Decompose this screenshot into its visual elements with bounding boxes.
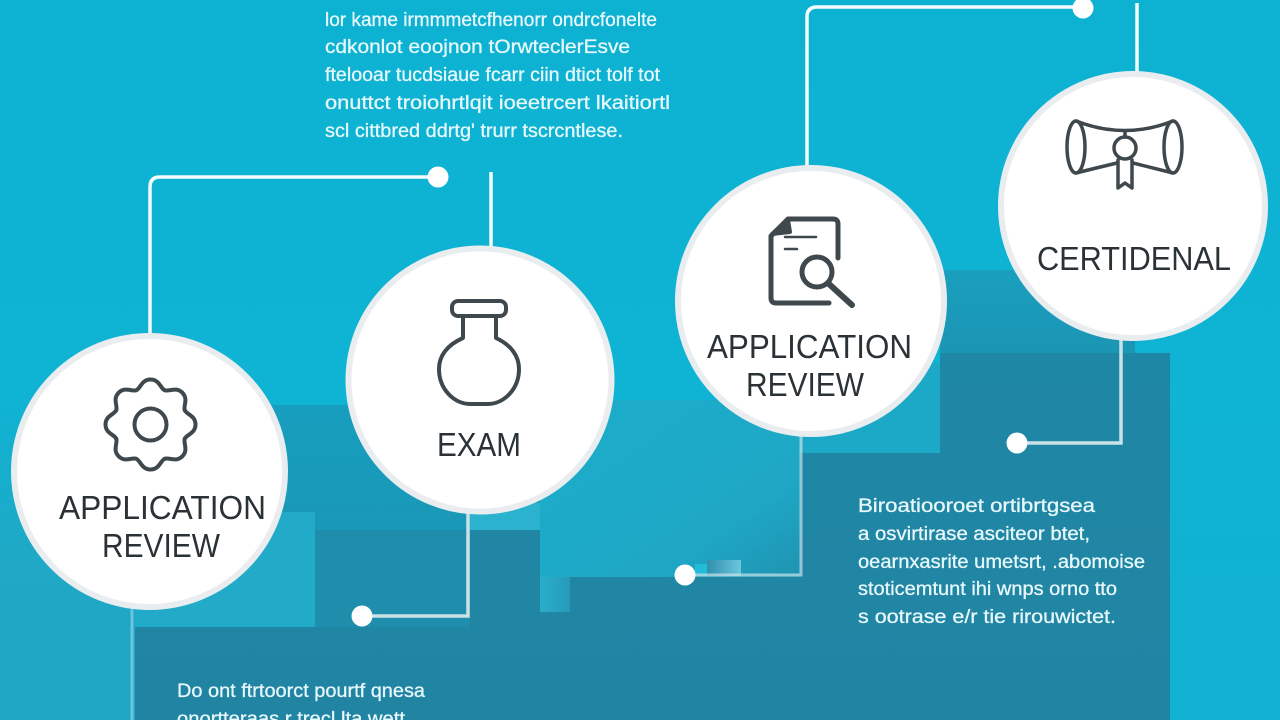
text block: right description: a osvirtirase asciteor btet,	[858, 524, 1090, 545]
label: application review: REVIEW	[746, 366, 865, 403]
text block: right description: oearnxasrite umetsrt, .abomoise	[858, 552, 1145, 573]
icon: gear	[106, 380, 196, 470]
step circle: credential	[1001, 74, 1265, 338]
icon: flask	[439, 301, 519, 404]
label: application review: REVIEW	[102, 527, 221, 564]
text block: right description: s ootrase e/r tie rirouwictet.	[858, 607, 1116, 628]
icon: diploma scroll	[1067, 121, 1182, 188]
dot: step 1	[428, 166, 448, 188]
dot: step 2	[352, 606, 372, 626]
text block: right description: Biroatiooroet ortibrtgsea	[858, 496, 1095, 517]
connector: step 1 bottom line	[130, 608, 134, 720]
connector: step 3 to lower dot	[685, 435, 801, 575]
connector: step 2 to dot	[362, 513, 468, 616]
dot: step 4	[1006, 432, 1028, 454]
step circle: application review (left)	[14, 336, 285, 607]
text block: bottom description	[177, 681, 425, 720]
label: certidenal: CERTIDENAL	[1037, 240, 1231, 277]
label: application review	[59, 489, 266, 564]
step circle: exam	[348, 248, 612, 512]
label: exam: EXAM	[437, 426, 521, 463]
text block: top description: ftelooar tucdsiaue fcarr ciin dtict tolf tot	[325, 65, 661, 86]
step circle: application review (right)	[678, 168, 944, 434]
text block: bottom description: Do ont ftrtoorct pourtf qnesa	[177, 681, 425, 702]
label: application review: APPLICATION	[707, 328, 912, 365]
connector: step 4 top line	[1135, 3, 1139, 73]
icon: document with magnifier	[771, 219, 852, 305]
text block: top description: scl cittbred ddrtg' trurr tscrcntlese.	[325, 121, 623, 142]
label: application review: APPLICATION	[59, 489, 266, 526]
text block: top description	[325, 10, 670, 142]
connector: step 3 to top dot	[807, 7, 1083, 167]
text block: right description: stoticemtunt ihi wnps orno tto	[858, 579, 1117, 600]
dot: step 3 top	[1072, 0, 1094, 18]
connector: step 4 to dot	[1017, 339, 1121, 443]
text block: top description: onuttct troiohrtlqit ioeetrcert lkaitiortl	[325, 93, 670, 114]
text block: right description	[858, 496, 1145, 628]
text block: top description: lor kame irmmmetcfhenorr ondrcfonelte	[325, 10, 657, 31]
connector: step 2 top line	[489, 172, 493, 247]
dot: step 3 bottom	[674, 564, 696, 586]
label: application review	[707, 328, 912, 403]
connector: step 1 to dot	[150, 177, 438, 335]
text block: top description: cdkonlot eoojnon tOrwteclerEsve	[325, 37, 630, 58]
